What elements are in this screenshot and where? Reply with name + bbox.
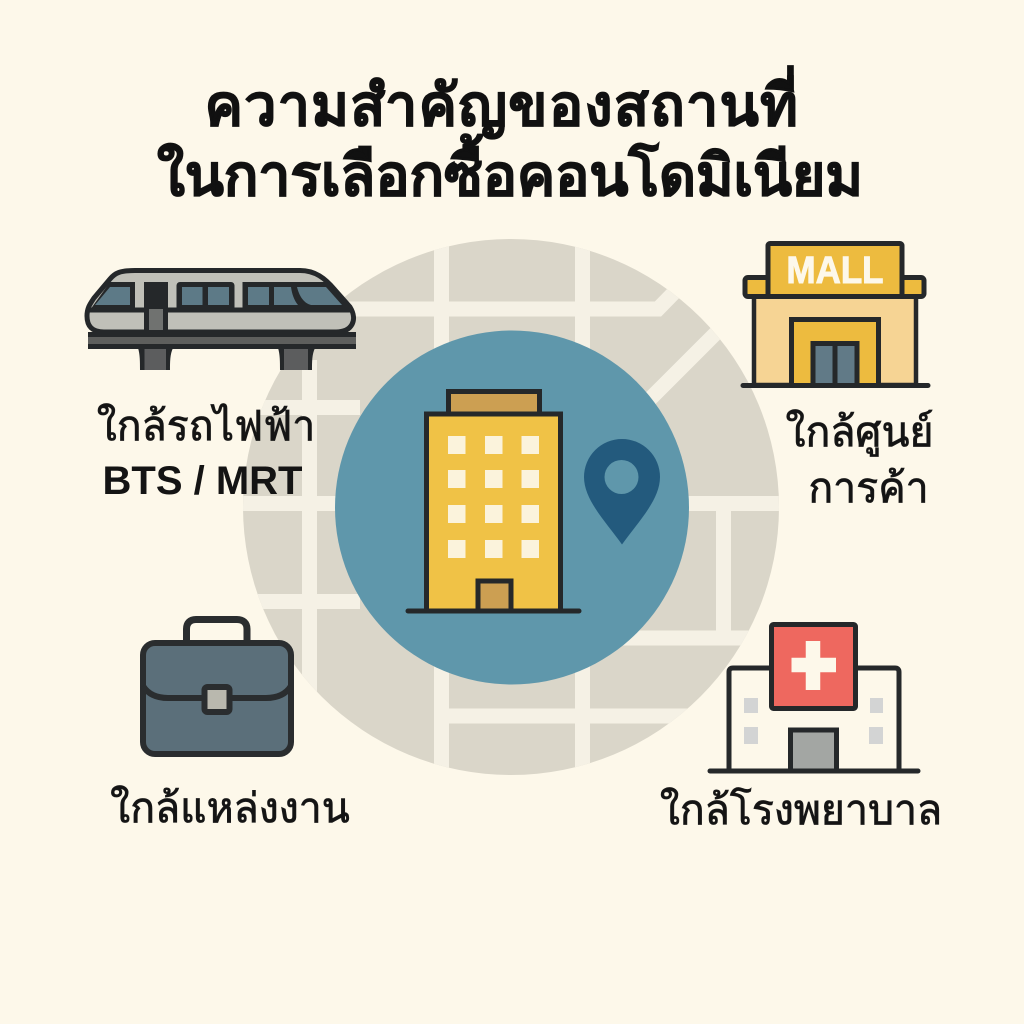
label: near hospital: ใกล้โรงพยาบาล (660, 787, 942, 833)
icon: hospital (710, 624, 918, 771)
label: near mall: ใกล้ศูนย์ (785, 409, 934, 455)
mall sign text: MALL (786, 250, 884, 292)
icon: briefcase (143, 620, 291, 754)
icon: sky train (87, 270, 356, 370)
graphics layer (84, 239, 930, 775)
title (157, 65, 863, 208)
label: near workplace: ใกล้แหล่งงาน (110, 785, 350, 831)
title: ความสำคัญของสถานที่ (205, 74, 799, 138)
label: near BTS/MRT: BTS / MRT (102, 459, 302, 503)
icon: location pin (584, 439, 660, 544)
label: near mall: การค้า (808, 465, 929, 511)
title: ในการเลือกซื้อคอนโดมิเนียม (157, 144, 863, 208)
icon: shopping mall (743, 244, 928, 386)
train rail (88, 332, 356, 349)
label: near BTS/MRT (97, 403, 315, 503)
label: near BTS/MRT: ใกล้รถไฟฟ้า (97, 403, 315, 449)
central teal circle (335, 330, 689, 684)
map circle background (230, 230, 790, 790)
label: near mall (785, 409, 934, 511)
icon: condominium building (408, 392, 579, 611)
train pillars (138, 348, 315, 370)
